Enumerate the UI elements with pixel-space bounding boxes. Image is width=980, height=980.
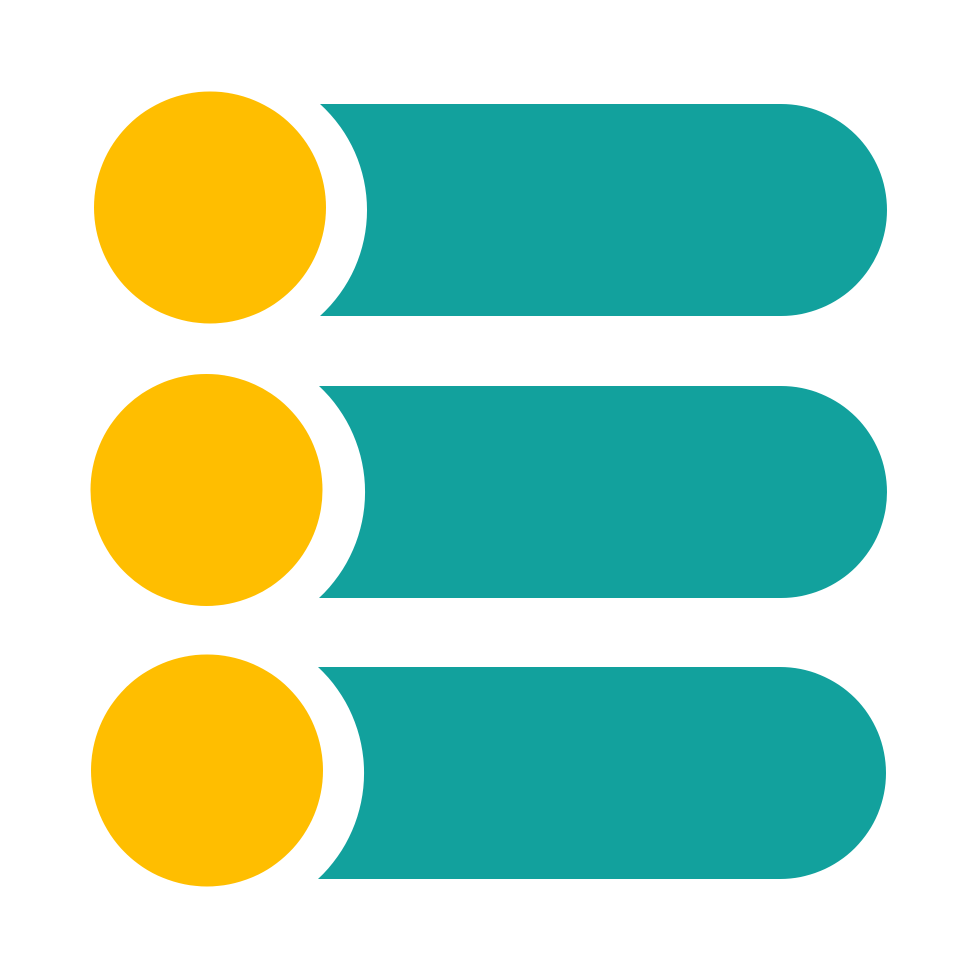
row 3 bullet circle — [91, 654, 323, 886]
row 3 teal bar — [318, 667, 886, 879]
row 3 — [91, 654, 886, 886]
row 2 — [90, 374, 887, 606]
row 1 bullet circle — [94, 92, 326, 324]
row 2 teal bar — [319, 386, 887, 598]
row 1 — [94, 92, 887, 324]
row 1 teal bar — [320, 104, 887, 316]
row 2 bullet circle — [90, 374, 322, 606]
